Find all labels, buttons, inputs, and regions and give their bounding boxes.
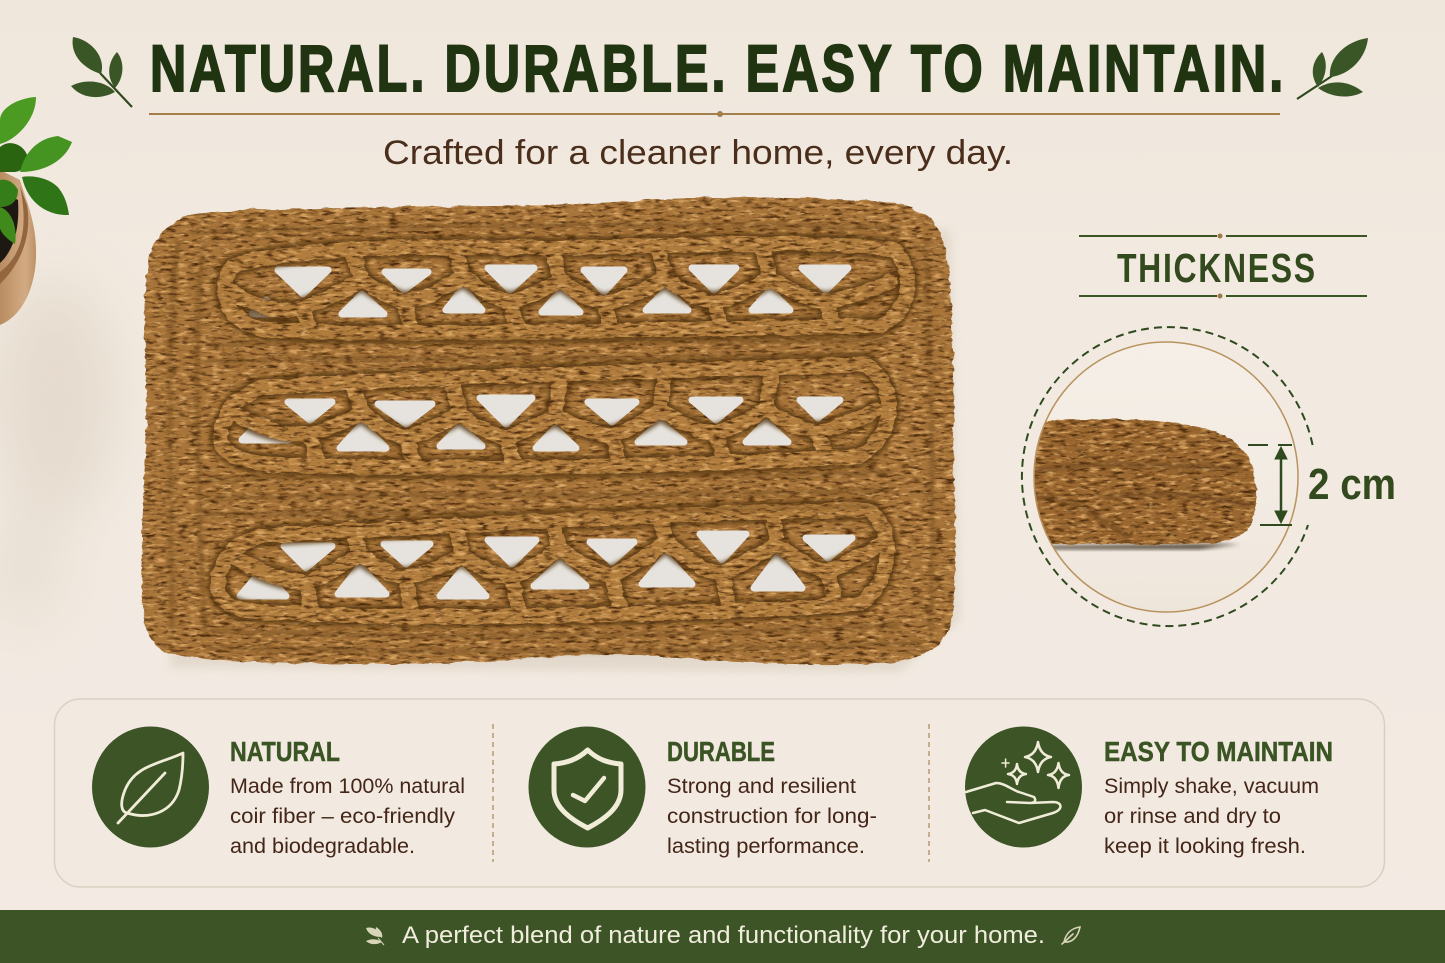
mat shadow <box>170 230 960 672</box>
icon: footer leaf right <box>1062 927 1080 944</box>
plant shadow on surface <box>0 280 115 630</box>
feature: easy to maintain <box>965 726 1333 858</box>
divider <box>928 724 930 862</box>
title: NATURAL. DURABLE. EASY TO MAINTAIN. <box>150 32 1283 106</box>
rope strands <box>218 244 908 617</box>
title underline <box>149 111 1280 117</box>
thickness heading <box>1079 234 1367 298</box>
footer tagline: A perfect blend of nature and functionality for your home. <box>402 922 1045 949</box>
feature: natural: NATURAL <box>230 736 340 767</box>
feature: natural: Made from 100% natural <box>230 775 465 798</box>
feature: durable: lasting performance. <box>667 835 865 858</box>
thickness value: 2 cm <box>1308 460 1396 509</box>
divider <box>492 724 494 862</box>
mat base body <box>142 197 955 665</box>
subtitle: Crafted for a cleaner home, every day. <box>383 134 1013 172</box>
feature: easy to maintain: or rinse and dry to <box>1104 805 1281 828</box>
feature: durable: construction for long- <box>667 805 877 828</box>
mat openings <box>240 268 852 596</box>
dashed ring <box>1022 327 1313 626</box>
footer band <box>0 910 1445 963</box>
feature: easy to maintain: EASY TO MAINTAIN <box>1104 736 1333 767</box>
thickness heading: THICKNESS <box>1117 245 1315 291</box>
long strand grooves <box>170 225 932 651</box>
coir doormat <box>142 197 955 665</box>
feature: easy to maintain: Simply shake, vacuum <box>1104 775 1319 798</box>
icon: leaves right of title <box>1297 38 1368 99</box>
rope strand shading <box>218 244 908 617</box>
feature: easy to maintain: keep it looking fresh. <box>1104 835 1306 858</box>
lens photo of mat edge <box>1034 418 1258 552</box>
icon: footer leaf left <box>366 927 384 945</box>
feature: natural <box>92 726 465 858</box>
feature: durable: Strong and resilient <box>667 775 856 798</box>
plant in pot <box>0 97 72 325</box>
feature: natural: coir fiber – eco-friendly <box>230 805 456 828</box>
thickness detail circle <box>1022 327 1396 626</box>
icon: leaves left of title <box>71 37 132 107</box>
feature: durable: DURABLE <box>667 736 775 767</box>
panel: features <box>54 699 1384 887</box>
feature: natural: and biodegradable. <box>230 835 415 858</box>
dimension arrow <box>1248 445 1292 525</box>
feature: durable <box>528 726 877 858</box>
